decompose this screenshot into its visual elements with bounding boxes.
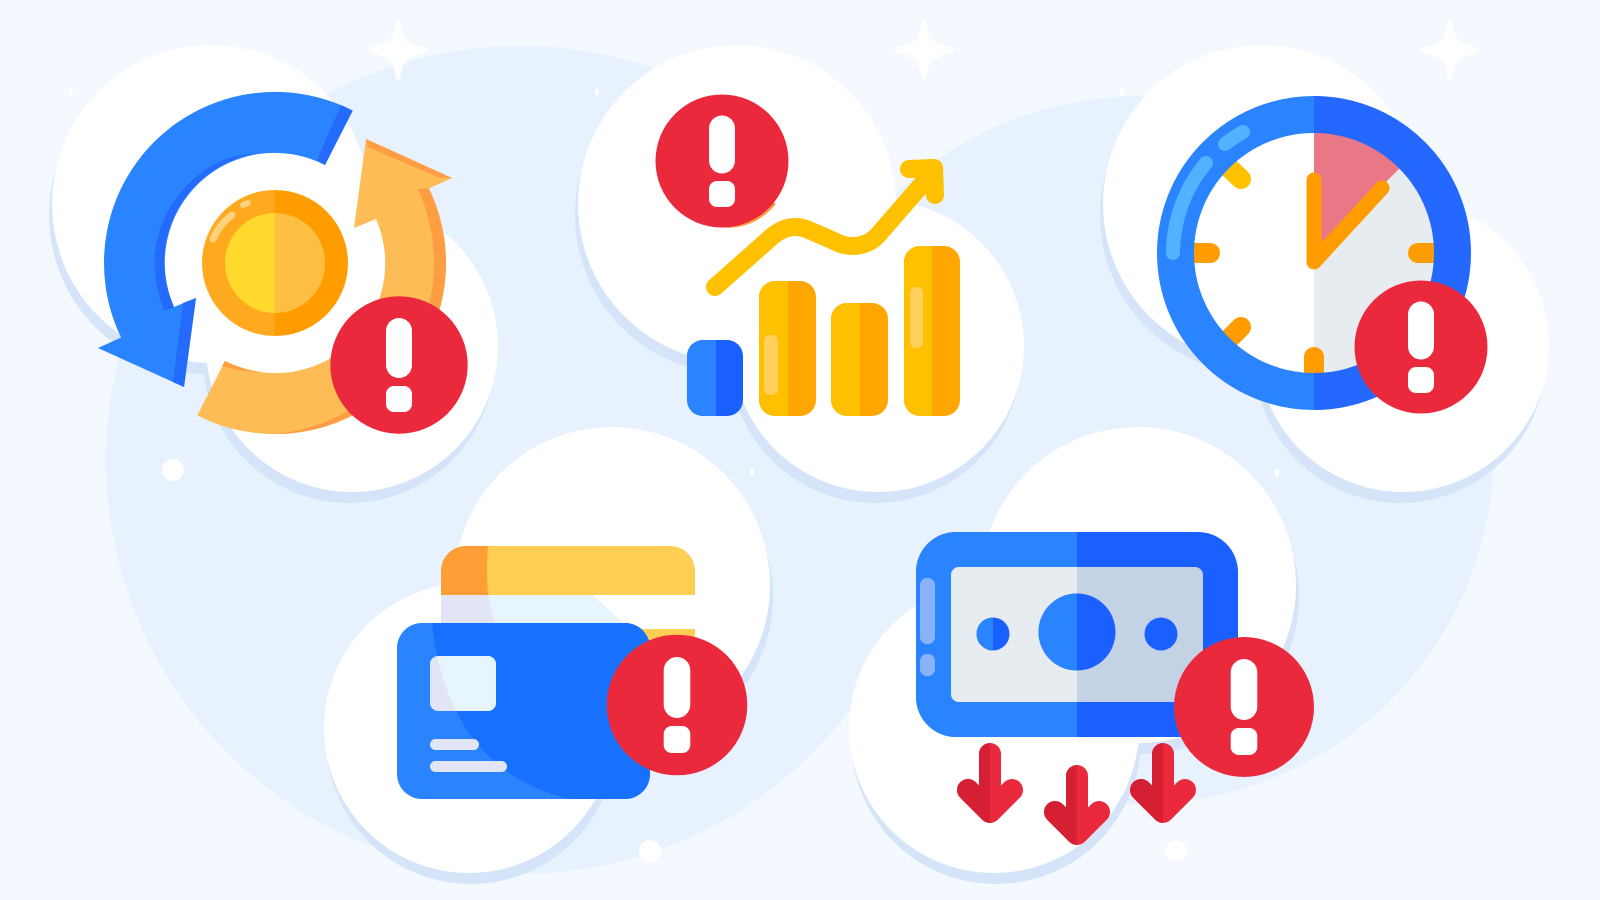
- icon: alert badge: [607, 635, 747, 775]
- panel: rising chart: [656, 94, 960, 416]
- icon: trend arrow: [715, 168, 935, 287]
- icon: alert badge: [1354, 280, 1488, 414]
- panel: banknote: [916, 532, 1314, 834]
- small decorative dots: [69, 88, 1279, 862]
- icon: alert badge: [656, 94, 788, 228]
- icon: alert badge: [1174, 637, 1314, 777]
- icon: orange circular arrow: [197, 139, 452, 434]
- icon: clock hands: [1314, 180, 1382, 262]
- bar chart: [687, 246, 960, 416]
- icon: blue circular arrow: [98, 92, 353, 387]
- panel: clock: [1173, 114, 1488, 414]
- icon: clock face: [1185, 128, 1444, 380]
- icon: front card: [397, 623, 650, 799]
- panel: coin cycle: [98, 92, 468, 434]
- icon: back card: [441, 546, 695, 665]
- icon: banknote: [916, 532, 1238, 737]
- icon: clock ring: [1173, 114, 1452, 392]
- icon: alert badge: [330, 296, 468, 434]
- panel: credit cards: [397, 546, 747, 799]
- icon: down arrows: [968, 754, 1185, 834]
- sparkle stars: [371, 23, 1477, 77]
- icon: gold coin: [202, 190, 348, 336]
